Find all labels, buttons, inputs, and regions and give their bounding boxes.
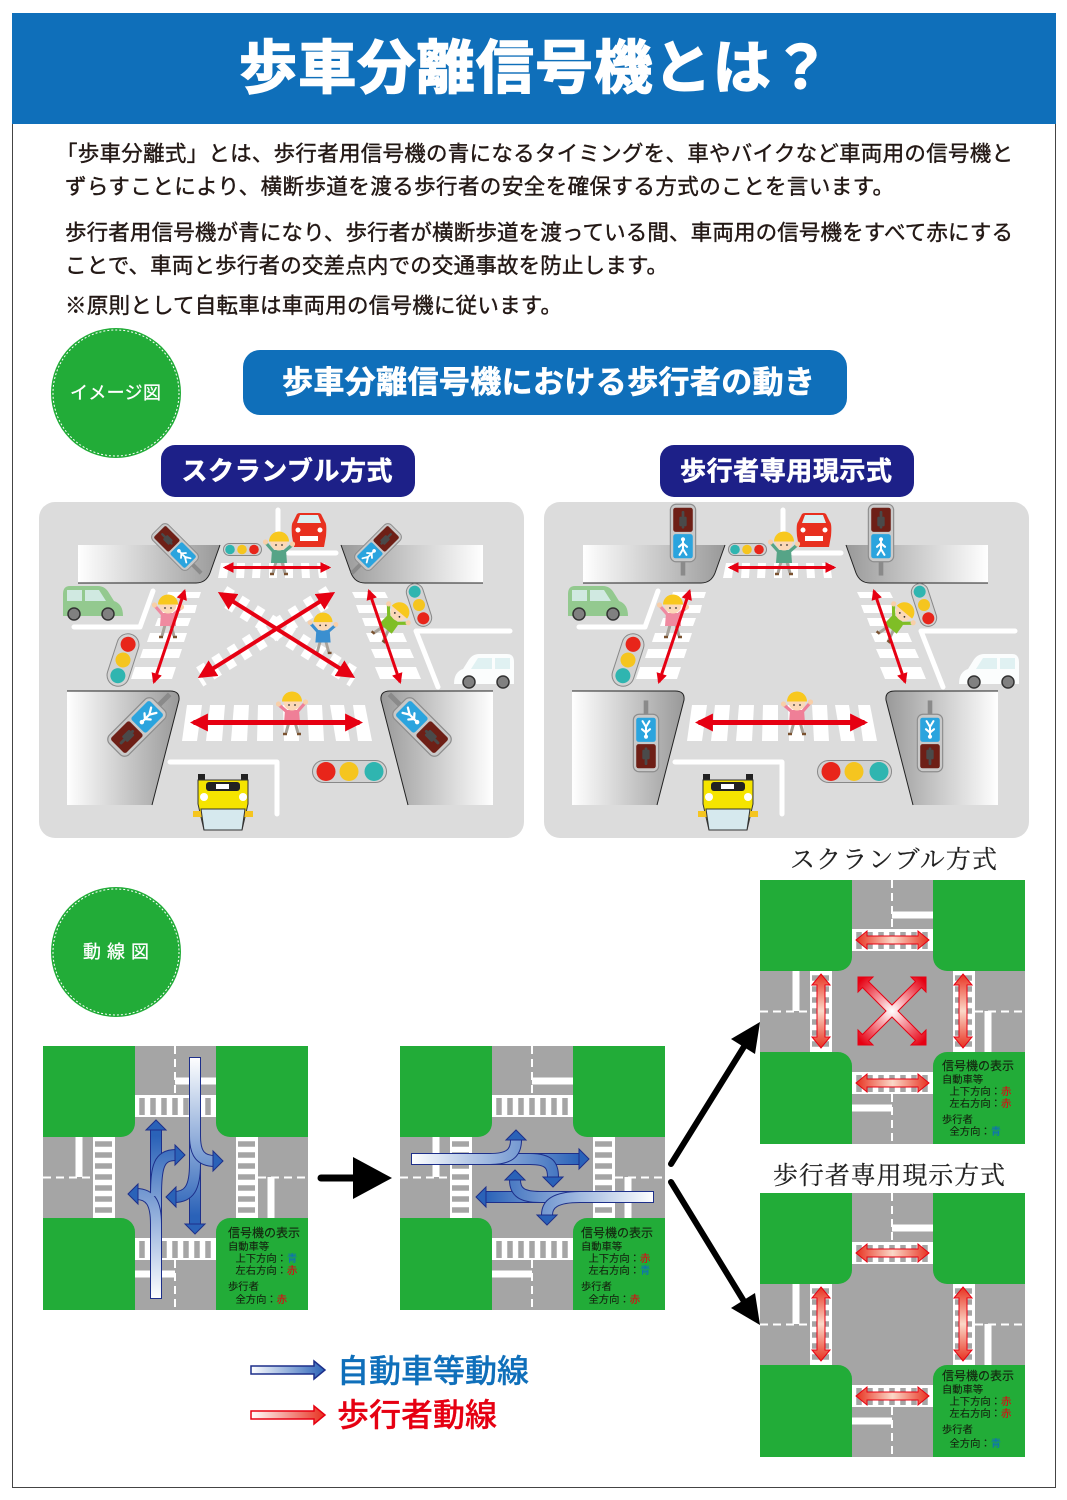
diagram: scramble phase bbox=[760, 880, 1025, 1144]
diagram: vertical traffic phase bbox=[43, 1046, 308, 1310]
signal legend: 信号機の表示 bbox=[942, 1369, 1014, 1383]
panel: pedestrian-only phase illustration (shares its scene with the scramble panel) bbox=[544, 502, 1029, 838]
diagram: horizontal traffic phase bbox=[400, 1046, 665, 1310]
text block: explanation: ずらすことにより、横断歩道を渡る歩行者の安全を確保する方式のことを言います。 bbox=[65, 175, 894, 199]
vehicle signal: bottom bbox=[312, 760, 386, 782]
diagonal arrows bbox=[201, 594, 352, 676]
vehicle signal: left bbox=[104, 631, 142, 689]
child: bottom bbox=[276, 692, 308, 734]
arrow: to pedestrian-only bbox=[671, 1182, 760, 1325]
signal legend: 左右方向：赤 bbox=[236, 1264, 297, 1277]
badge: image diagram bbox=[51, 328, 181, 458]
ped signal: bottom right bbox=[917, 700, 943, 772]
caption: pedestrian-only: 歩行者専用現示方式 bbox=[773, 1162, 1005, 1190]
text block: explanation: ことで、車両と歩行者の交差点内での交通事故を防止します。 bbox=[65, 254, 668, 278]
legend: pedestrian flow bbox=[251, 1397, 497, 1433]
heading pill: pedestrian-only phase bbox=[660, 445, 914, 497]
ped signal: bottom left bbox=[105, 685, 179, 759]
heading pill: scramble bbox=[161, 445, 415, 497]
buildings bbox=[67, 545, 493, 805]
title: 歩車分離信号機とは？ bbox=[239, 36, 830, 101]
legend: pedestrian flow: 歩行者動線 bbox=[337, 1397, 497, 1433]
flow arrows: north-south vehicles bbox=[128, 1057, 223, 1299]
signal legend: 歩行者 bbox=[228, 1280, 259, 1293]
ped signal: top left bbox=[670, 504, 696, 576]
ped signal: top right bbox=[868, 504, 894, 576]
heading pill: pedestrian-only phase: 歩行者専用現示式 bbox=[680, 456, 892, 486]
signal legend: 上下方向：赤 bbox=[950, 1395, 1011, 1408]
road markings bbox=[74, 510, 510, 814]
child: right bbox=[366, 594, 418, 647]
bus: yellow bbox=[193, 774, 253, 830]
badge: flow line diagram bbox=[51, 887, 181, 1017]
legend: vehicle flow: 自動車等動線 bbox=[337, 1353, 529, 1389]
ped signal: top left bbox=[150, 522, 209, 581]
signal legend: 自動車等 bbox=[581, 1240, 622, 1253]
signal legend: 信号機の表示 bbox=[228, 1226, 300, 1240]
signal legend: 左右方向：青 bbox=[588, 1264, 650, 1277]
arrow: to scramble bbox=[671, 1022, 760, 1164]
diagonal pedestrian arrows bbox=[858, 977, 926, 1045]
ped signal: bottom left bbox=[633, 700, 659, 772]
signal legend: 自動車等 bbox=[942, 1383, 983, 1396]
heading pill: scramble: スクランブル方式 bbox=[182, 456, 392, 486]
text block: explanation: 「歩車分離式」とは、歩行者用信号機の青になるタイミングを、車やバイクなど車両用の信号機と bbox=[56, 142, 1013, 166]
pedestrian arrows bbox=[812, 1244, 972, 1405]
child: top bbox=[263, 532, 295, 574]
flow arrows: east-west vehicles bbox=[411, 1130, 654, 1225]
vehicle signal: top bbox=[224, 544, 262, 556]
signal legend bbox=[581, 1226, 653, 1306]
pedestrian arrows bbox=[812, 931, 972, 1092]
signal legend: 信号機の表示 bbox=[581, 1226, 653, 1240]
badge: image diagram: イメージ図 bbox=[70, 383, 161, 403]
header banner bbox=[12, 13, 1056, 124]
car: red bbox=[292, 513, 326, 547]
diagram: pedestrian-only phase bbox=[760, 1193, 1025, 1457]
child: left bbox=[152, 594, 184, 637]
signal legend: 全方向：赤 bbox=[236, 1293, 287, 1306]
signal legend: 歩行者 bbox=[942, 1113, 973, 1126]
ped signal: top right bbox=[344, 522, 403, 581]
signal legend: 全方向：青 bbox=[950, 1125, 1001, 1138]
car: green bbox=[63, 586, 123, 620]
diagonal crosswalks bbox=[195, 590, 358, 682]
signal legend: 左右方向：赤 bbox=[950, 1097, 1011, 1110]
arrow: to next phase bbox=[321, 1157, 392, 1199]
text block: explanation: 歩行者用信号機が青になり、歩行者が横断歩道を渡っている間、車両用の信号機をすべて赤にする bbox=[65, 221, 1013, 245]
signal legend: 自動車等 bbox=[228, 1240, 269, 1253]
vehicle signal: right bbox=[404, 581, 434, 629]
signal legend: 上下方向：赤 bbox=[588, 1252, 650, 1265]
text block: explanation: ※原則として自転車は車両用の信号機に従います。 bbox=[65, 294, 562, 318]
badge: flow line diagram: 動線図 bbox=[83, 942, 149, 962]
car: white bbox=[454, 654, 514, 688]
panel: scramble intersection illustration bbox=[39, 502, 524, 838]
signal legend bbox=[228, 1226, 300, 1306]
signal legend bbox=[942, 1059, 1014, 1138]
signal legend: 歩行者 bbox=[942, 1423, 973, 1436]
heading pill: pedestrian movement: 歩車分離信号機における歩行者の動き bbox=[282, 365, 815, 400]
signal legend: 上下方向：青 bbox=[236, 1252, 297, 1265]
caption: scramble: スクランブル方式 bbox=[790, 846, 997, 874]
signal legend: 歩行者 bbox=[581, 1280, 612, 1293]
child: centre bbox=[308, 613, 338, 653]
ped signal: bottom right bbox=[380, 685, 454, 759]
signal legend: 上下方向：赤 bbox=[950, 1085, 1011, 1098]
signal legend: 全方向：青 bbox=[950, 1437, 1001, 1450]
legend: vehicle flow bbox=[251, 1353, 529, 1389]
signal legend: 左右方向：赤 bbox=[950, 1407, 1011, 1420]
signal legend bbox=[942, 1369, 1014, 1450]
crosswalks bbox=[131, 563, 421, 741]
signal legend: 自動車等 bbox=[942, 1073, 983, 1086]
walking arrows bbox=[154, 568, 400, 722]
text block: explanation bbox=[56, 142, 1013, 318]
signal legend: 信号機の表示 bbox=[942, 1059, 1014, 1073]
signal legend: 全方向：赤 bbox=[588, 1293, 640, 1306]
heading pill: pedestrian movement bbox=[243, 350, 847, 415]
